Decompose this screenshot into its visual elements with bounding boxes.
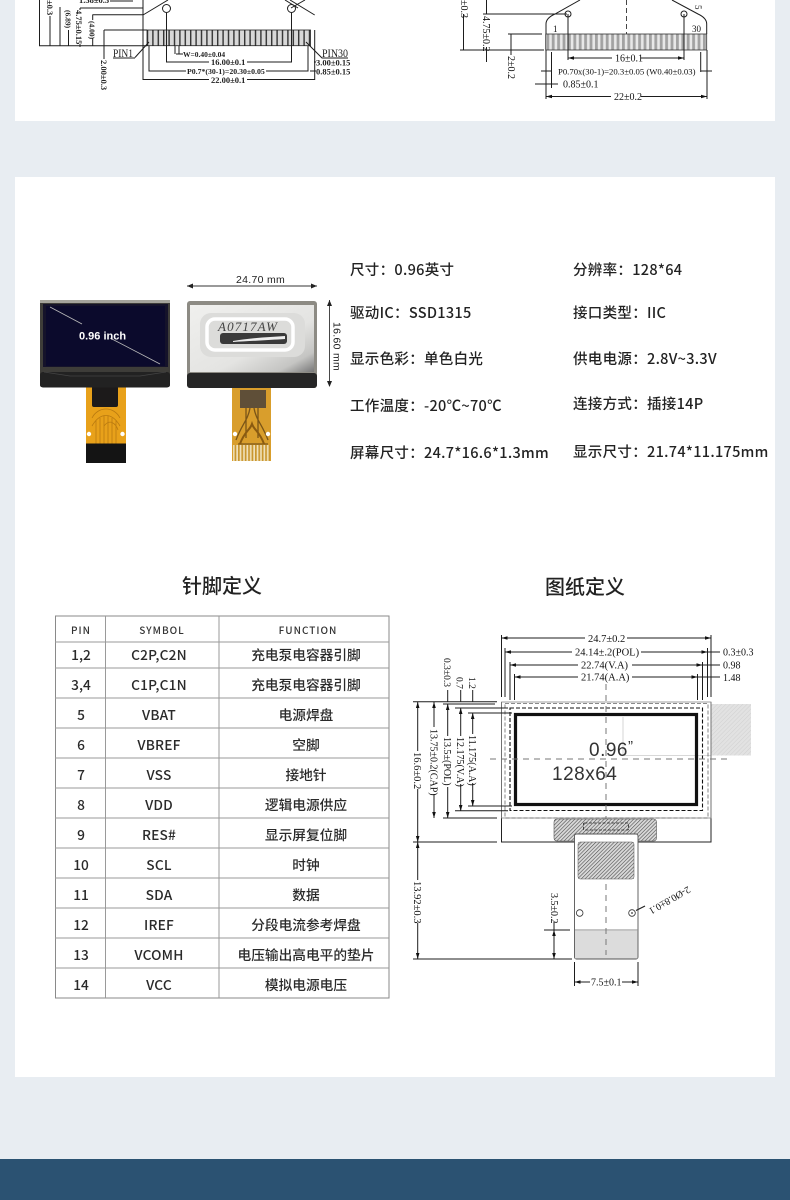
table: pin definitions: 接地针: [285, 764, 327, 784]
drawing: module dimensions: 128x64: [552, 764, 617, 785]
drawing: left connector dimensions: (6.89): [64, 10, 72, 29]
drawing: left connector dimensions: PIN1: [113, 46, 133, 60]
panel: top mechanical drawings: [15, 0, 775, 121]
drawing: module dimensions: ”: [628, 738, 633, 755]
table: pin definitions: 14: [73, 974, 89, 994]
drawing: right connector dimensions: 0.85±0.1: [563, 80, 598, 90]
drawing: module dimensions: 0.3±0.3: [441, 658, 451, 687]
table: pin definitions: 充电泵电容器引脚: [251, 644, 361, 664]
drawing: left connector dimensions: 2.00±0.3: [99, 60, 109, 90]
table: pin definitions: VBAT: [141, 704, 176, 724]
photo: OLED module front: [40, 300, 170, 463]
table: pin definitions: 8: [77, 794, 85, 814]
table: pin definitions: 逻辑电源供应: [265, 794, 347, 814]
drawing: module dimensions: 7.5±0.1: [591, 978, 622, 988]
text block: specifications right column: 接口类型：IIC: [573, 302, 666, 323]
table: pin definitions: 3,4: [71, 674, 91, 694]
drawing: left connector dimensions: PIN30: [322, 46, 348, 60]
table: pin definitions: RES#: [142, 824, 176, 844]
table: pin definitions: FUNCTION: [279, 622, 337, 637]
table: pin definitions: VBREF: [136, 734, 181, 754]
table: pin definitions: 时钟: [292, 854, 320, 874]
text block: specifications left column: 尺寸：0.96英寸: [350, 259, 454, 280]
table: pin definitions: 6: [77, 734, 85, 754]
table: pin definitions: [55, 616, 389, 998]
table: pin definitions: VSS: [146, 764, 172, 784]
drawing: left connector dimensions: [39, 0, 350, 90]
drawing: module dimensions: [411, 633, 754, 988]
table: pin definitions: SCL: [146, 854, 172, 874]
drawing: left connector dimensions: W=0.40±0.04: [183, 50, 225, 59]
drawing: module dimensions: 1.48: [723, 673, 740, 684]
drawing: left connector dimensions: 16.00±0.1: [211, 57, 245, 67]
table: pin definitions: C1P,C1N: [131, 674, 187, 694]
heading: drawing definition: 图纸定义: [545, 571, 625, 600]
drawing: module dimensions: 1.2: [466, 677, 476, 689]
text block: specifications right column: 连接方式：插接14P: [573, 393, 703, 414]
text block: specifications left column: 屏幕尺寸：24.7*16.6*1.3mm: [350, 442, 549, 463]
drawing: module dimensions: 0.98: [723, 660, 740, 672]
drawing: right connector dimensions: 16±0.1: [615, 54, 643, 64]
drawing: right connector dimensions: 2±0.2: [505, 56, 516, 79]
drawing: module dimensions: 13.92±0.3: [411, 881, 422, 924]
drawing: right connector dimensions: 5: [693, 5, 703, 10]
photo: OLED module back with dimensions: 24.70 mm: [236, 274, 285, 286]
text block: specifications right column: 分辨率：128*64: [573, 259, 682, 280]
text block: specifications left column: 工作温度：-20℃~70℃: [350, 395, 502, 416]
table: pin definitions: 电压输出高电平的垫片: [238, 944, 374, 964]
table: pin definitions: 13: [73, 944, 89, 964]
drawing: right connector dimensions: 22±0.2: [614, 92, 642, 103]
table: pin definitions: VCC: [145, 974, 172, 994]
photo: OLED module back with dimensions: [187, 274, 342, 461]
drawing: module dimensions: 11.175(A.A): [466, 735, 477, 786]
drawing: left connector dimensions: 3.00±0.15: [316, 58, 350, 68]
text block: specifications left column: 驱动IC：SSD1315: [350, 302, 472, 323]
table: pin definitions: 7: [77, 764, 85, 784]
drawing: module dimensions: 24.14±.2(POL): [575, 648, 640, 658]
text block: specifications left column: 显示色彩：单色白光: [350, 348, 483, 369]
table: pin definitions: SDA: [146, 884, 173, 904]
photo: OLED module back with dimensions: A0717AW: [217, 319, 278, 334]
drawing: left connector dimensions: 0.85±0.15: [316, 66, 350, 76]
table: pin definitions: 分段电流参考焊盘: [251, 914, 361, 934]
table: pin definitions: SYMBOL: [139, 622, 185, 637]
drawing: right connector dimensions: 30: [692, 24, 702, 34]
drawing: left connector dimensions: P0.7*(30-1)=20.30±0.05: [187, 67, 265, 76]
drawing: module dimensions: 0.7: [454, 677, 464, 689]
heading: pin definition: 针脚定义: [182, 570, 262, 599]
drawing: left connector dimensions: 4.75±0.15: [74, 10, 84, 44]
photo: OLED module back with dimensions: 16.60 mm: [330, 322, 342, 371]
table: pin definitions: 5: [77, 704, 85, 724]
table: pin definitions: IREF: [144, 914, 174, 934]
drawing: module dimensions: 0.96: [589, 740, 628, 761]
drawing: module dimensions: 13.5±(POL): [441, 737, 452, 786]
footer bar: [0, 1159, 790, 1200]
drawing: module dimensions: 13.75±0.2(CAP): [428, 729, 438, 796]
drawing: right connector dimensions: 4.75±0.2: [480, 16, 491, 52]
drawing: module dimensions: 16.6±0.2: [411, 752, 422, 789]
drawing: module dimensions: 0.3±0.3: [723, 648, 754, 658]
table: pin definitions: PIN: [71, 622, 91, 637]
drawing: left connector dimensions: ±0.3: [45, 0, 55, 15]
photo: OLED module front: 0.96 inch: [79, 330, 126, 342]
table: pin definitions: 9: [77, 824, 85, 844]
drawing: right connector dimensions: 1: [553, 24, 558, 34]
text block: specifications right column: 供电电源：2.8V~3.3V: [573, 348, 717, 369]
drawing: left connector dimensions: (4.00): [88, 21, 96, 40]
table: pin definitions: 模拟电源电压: [265, 974, 347, 994]
panel: specifications and pin table: [15, 177, 775, 1077]
text block: specifications right column: [573, 259, 769, 462]
text block: specifications left column: [350, 259, 549, 463]
drawing: right connector dimensions: P0.70x(30-1)=20.3±0.05 (W0.40±0.03): [558, 66, 696, 76]
table: pin definitions: 电源焊盘: [279, 704, 334, 724]
drawing: module dimensions: 22.74(V.A): [581, 660, 629, 672]
drawing: right connector dimensions: ±0.3: [458, 0, 469, 18]
table: pin definitions: 1,2: [71, 644, 91, 664]
drawing: module dimensions: 21.74(A.A): [581, 672, 630, 684]
text block: specifications right column: 显示尺寸：21.74*11.175mm: [573, 441, 769, 462]
drawing: left connector dimensions: 22.00±0.1: [211, 75, 245, 85]
table: pin definitions: C2P,C2N: [131, 644, 187, 664]
table: pin definitions: VCOMH: [133, 944, 184, 964]
table: pin definitions: 10: [73, 854, 89, 874]
drawing: module dimensions: 24.7±0.2: [588, 634, 625, 645]
drawing: module dimensions: 2-Ø0.8±0.1: [647, 883, 692, 916]
table: pin definitions: 空脚: [292, 734, 320, 754]
drawing: module dimensions: 3.5±0.2: [548, 893, 559, 924]
table: pin definitions: 12: [73, 914, 89, 934]
drawing: module dimensions: 12.175(V.A): [454, 737, 465, 787]
table: pin definitions: 显示屏复位脚: [265, 824, 347, 844]
table: pin definitions: 充电泵电容器引脚: [251, 674, 361, 694]
table: pin definitions: 11: [73, 884, 89, 904]
table: pin definitions: 数据: [292, 884, 320, 904]
drawing: right connector dimensions: [458, 0, 712, 103]
table: pin definitions: VDD: [144, 794, 173, 814]
